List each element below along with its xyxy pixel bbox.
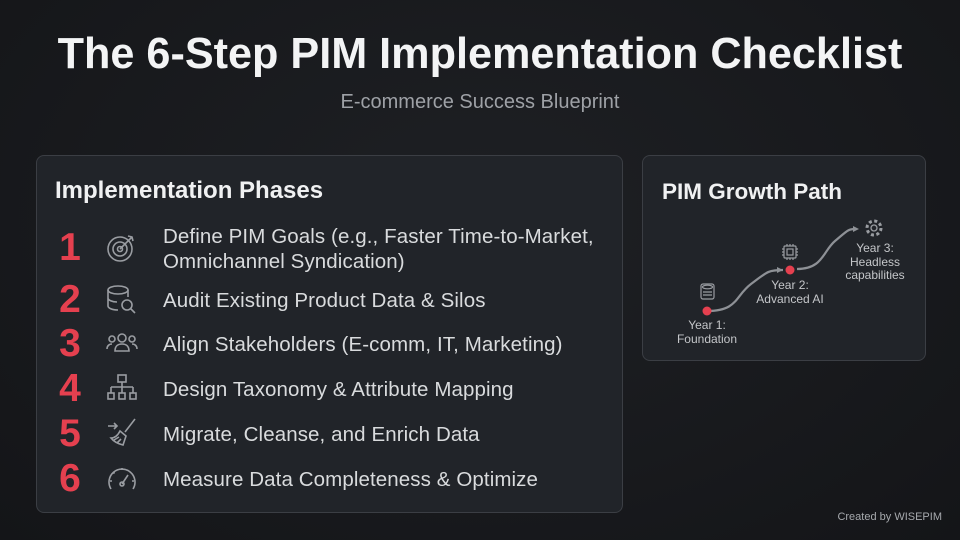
- step 3: [59, 322, 563, 365]
- label: year 3: Headless: [850, 254, 900, 268]
- step 6: Measure Data Completeness & Optimize: [163, 468, 538, 491]
- step 6: [59, 457, 538, 500]
- panel: implementation phases: [36, 155, 623, 513]
- step 1: [59, 225, 594, 273]
- label: year 3: [845, 241, 905, 282]
- step 6: 6: [59, 457, 81, 500]
- step 3: 3: [59, 322, 81, 365]
- step 2: Audit Existing Product Data & Silos: [163, 289, 486, 312]
- label: year 3: Year 3:: [856, 241, 894, 255]
- label: year 1: [677, 318, 737, 346]
- step 4: 4: [59, 367, 81, 410]
- label: year 3: capabilities: [845, 268, 905, 282]
- credit: Created by WISEPIM: [837, 511, 942, 523]
- label: year 2: [756, 278, 824, 306]
- step 4: Design Taxonomy & Attribute Mapping: [163, 378, 514, 401]
- label: year 2: Year 2:: [771, 278, 809, 292]
- step 3: Align Stakeholders (E-comm, IT, Marketing): [163, 333, 563, 356]
- subtitle: E-commerce Success Blueprint: [340, 91, 619, 113]
- step 1: Omnichannel Syndication): [163, 250, 405, 273]
- step 5: [59, 412, 480, 455]
- label: year 1: Year 1:: [688, 318, 726, 332]
- step 2: 2: [59, 278, 81, 321]
- label: year 2: Advanced AI: [756, 292, 824, 306]
- label: year 1: Foundation: [677, 332, 737, 346]
- growth path chart: [700, 220, 882, 316]
- title: The 6-Step PIM Implementation Checklist: [58, 30, 902, 78]
- step 2: [59, 278, 486, 321]
- step 1: Define PIM Goals (e.g., Faster Time-to-Market,: [163, 225, 594, 248]
- step 1: 1: [59, 226, 81, 269]
- panel: PIM growth path: [642, 155, 926, 361]
- step 5: Migrate, Cleanse, and Enrich Data: [163, 423, 480, 446]
- heading: implementation phases: Implementation Phases: [55, 177, 323, 204]
- step 4: [59, 367, 514, 410]
- heading: PIM growth path: PIM Growth Path: [662, 179, 842, 204]
- step 5: 5: [59, 412, 81, 455]
